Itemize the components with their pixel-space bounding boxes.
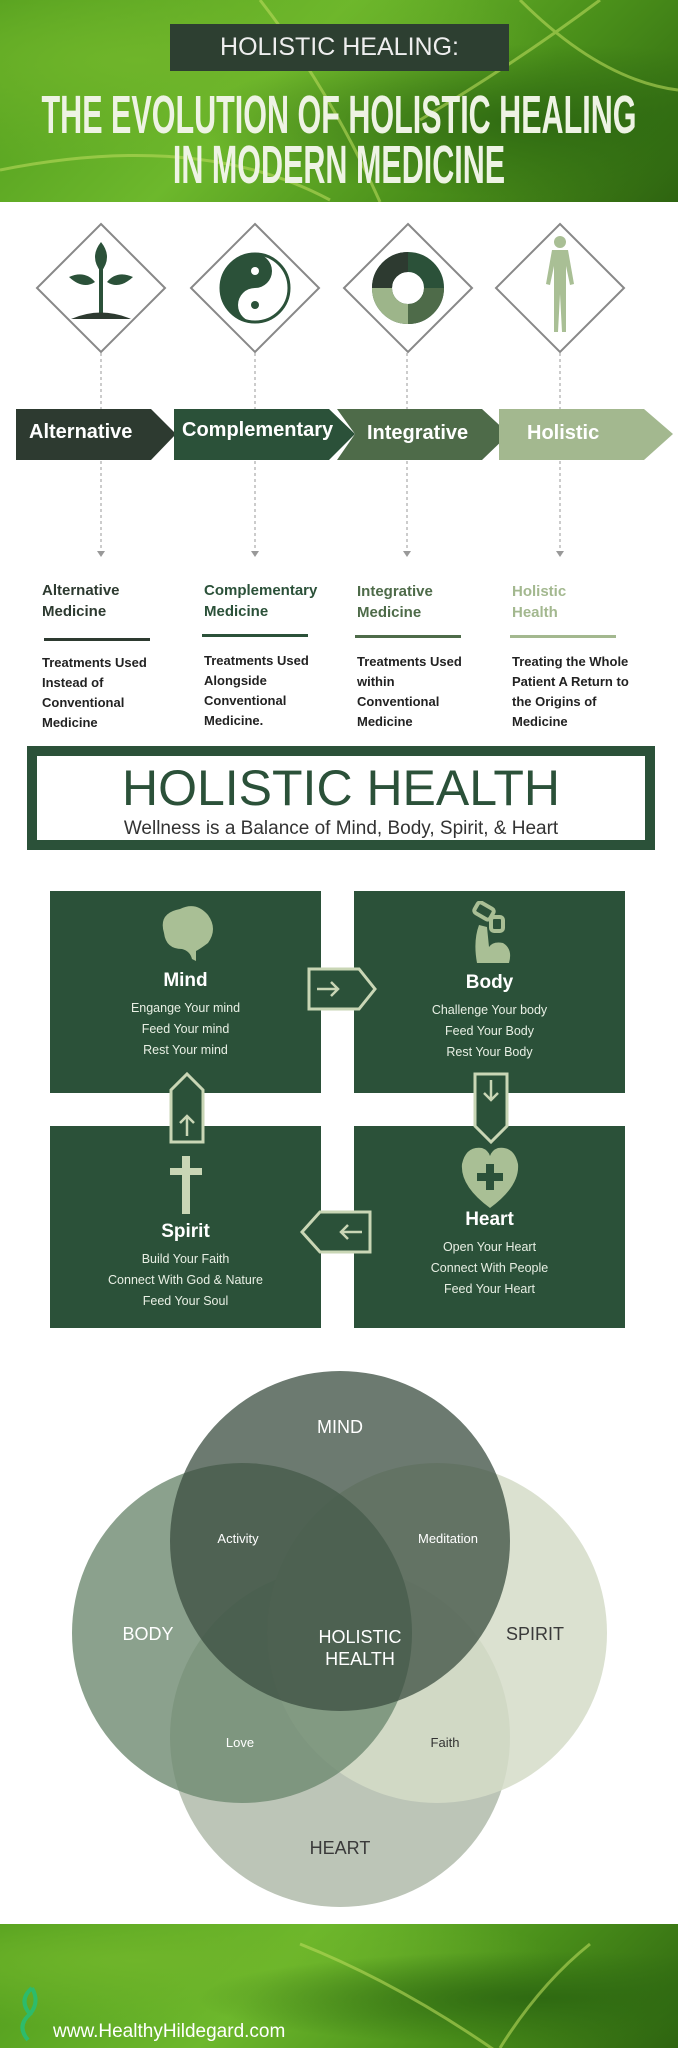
header banner — [0, 0, 678, 202]
column: holistic: Health — [512, 604, 558, 621]
heading: HOLISTIC HEALTH — [122, 760, 560, 816]
subtitle box — [170, 24, 509, 71]
arrow: heart to spirit — [300, 1210, 372, 1254]
circle: heart — [170, 1567, 510, 1907]
icon: heart — [462, 1148, 518, 1208]
circle: mind — [170, 1371, 510, 1711]
timeline diagram: Alternative — [29, 421, 132, 443]
panel: body: Challenge Your body — [432, 1003, 547, 1017]
column: integrative: Conventional — [357, 694, 439, 709]
column: complementary: Medicine — [204, 603, 268, 620]
column: holistic: Medicine — [512, 714, 568, 729]
venn diagram — [72, 1371, 607, 1907]
column: integrative: Treatments Used — [357, 654, 462, 669]
column: holistic: Treating the Whole — [512, 654, 628, 669]
icon: sprout diamond — [36, 222, 166, 353]
column: alternative: Medicine — [42, 603, 106, 620]
column: complementary: Complementary — [204, 582, 317, 599]
holistic health banner — [27, 746, 655, 850]
column: complementary: Conventional — [204, 693, 286, 708]
overlap labels: HEALTH — [325, 1649, 395, 1669]
overlap labels: Meditation — [418, 1531, 478, 1546]
arrow: integrative — [337, 409, 499, 460]
panel: mind: Mind — [163, 970, 208, 991]
column: holistic: the Origins of — [512, 694, 596, 709]
column: alternative: Medicine — [42, 715, 98, 730]
panel: spirit: Connect With God & Nature — [108, 1273, 263, 1287]
column: integrative — [355, 583, 462, 729]
column: alternative — [42, 582, 150, 730]
timeline diagram: Integrative — [367, 422, 468, 444]
circle: mind: MIND — [317, 1417, 363, 1437]
column: integrative: Medicine — [357, 714, 413, 729]
panel: spirit — [50, 1126, 321, 1328]
column: alternative: Treatments Used — [42, 655, 147, 670]
overlap labels: Activity — [217, 1531, 259, 1546]
timeline diagram — [16, 222, 673, 730]
panel: heart: Connect With People — [431, 1261, 548, 1275]
subheading: Wellness is a Balance of Mind, Body, Spirit, & Heart — [124, 818, 558, 839]
panel: mind: Feed Your mind — [142, 1022, 229, 1036]
panel: spirit: Build Your Faith — [142, 1252, 229, 1266]
arrow: mind to body — [308, 968, 377, 1010]
icon: yin yang diamond — [190, 222, 320, 353]
timeline diagram: Complementary — [182, 419, 333, 441]
timeline diagram: Holistic — [527, 422, 599, 444]
arrow: complementary — [174, 409, 355, 460]
footer banner — [0, 1924, 678, 2048]
column: alternative: Instead of — [42, 675, 103, 690]
panel: spirit: Feed Your Soul — [143, 1294, 228, 1308]
panel: mind: Rest Your mind — [143, 1043, 228, 1057]
panel: body: Feed Your Body — [445, 1024, 534, 1038]
overlap labels: Love — [226, 1735, 254, 1750]
panel: heart: Feed Your Heart — [444, 1282, 535, 1296]
column: integrative: Integrative — [357, 583, 433, 600]
main title — [42, 85, 636, 195]
column: complementary — [202, 582, 318, 728]
main title: THE EVOLUTION OF HOLISTIC HEALING — [42, 85, 636, 145]
panel: spirit: Spirit — [161, 1221, 210, 1242]
icon: dumbbell arm — [472, 901, 510, 963]
icon: human diamond — [494, 222, 626, 353]
panel: heart: Open Your Heart — [443, 1240, 536, 1254]
panel: mind — [50, 891, 321, 1093]
column: integrative: Medicine — [357, 604, 421, 621]
arrow: holistic — [499, 409, 673, 460]
circle: spirit: SPIRIT — [506, 1624, 564, 1644]
overlap labels: HOLISTIC — [318, 1627, 402, 1647]
circle: body: BODY — [122, 1624, 174, 1644]
panel: body — [354, 891, 625, 1093]
panel: heart: Heart — [465, 1209, 514, 1230]
column: complementary: Medicine. — [204, 713, 263, 728]
icon: brain — [162, 906, 213, 961]
website: www.HealthyHildegard.com — [53, 2021, 285, 2042]
main title: IN MODERN MEDICINE — [173, 135, 505, 195]
overlap labels — [217, 1531, 478, 1750]
arrow: spirit to mind — [170, 1072, 204, 1144]
panel: body: Rest Your Body — [446, 1045, 533, 1059]
panel: body: Body — [466, 972, 513, 993]
subtitle box: HOLISTIC HEALING: — [220, 33, 459, 61]
arrow: body to heart — [474, 1072, 508, 1144]
circle: body — [72, 1463, 412, 1803]
column: holistic — [510, 583, 629, 729]
panel: heart — [354, 1126, 625, 1328]
column: alternative: Alternative — [42, 582, 120, 599]
column: alternative: Conventional — [42, 695, 124, 710]
overlap labels: Faith — [431, 1735, 459, 1750]
column: holistic: Holistic — [512, 583, 566, 600]
column: integrative: within — [357, 674, 395, 689]
icon: cross — [170, 1156, 202, 1214]
logo — [20, 1986, 38, 2041]
panel: mind: Engange Your mind — [131, 1001, 240, 1015]
circle: heart: HEART — [310, 1838, 370, 1858]
icon: cycle diamond — [342, 222, 474, 354]
column: complementary: Treatments Used — [204, 653, 309, 668]
arrow: alternative — [16, 409, 174, 460]
column: holistic: Patient A Return to — [512, 674, 629, 689]
circle: spirit — [267, 1463, 607, 1803]
column: complementary: Alongside — [204, 673, 267, 688]
